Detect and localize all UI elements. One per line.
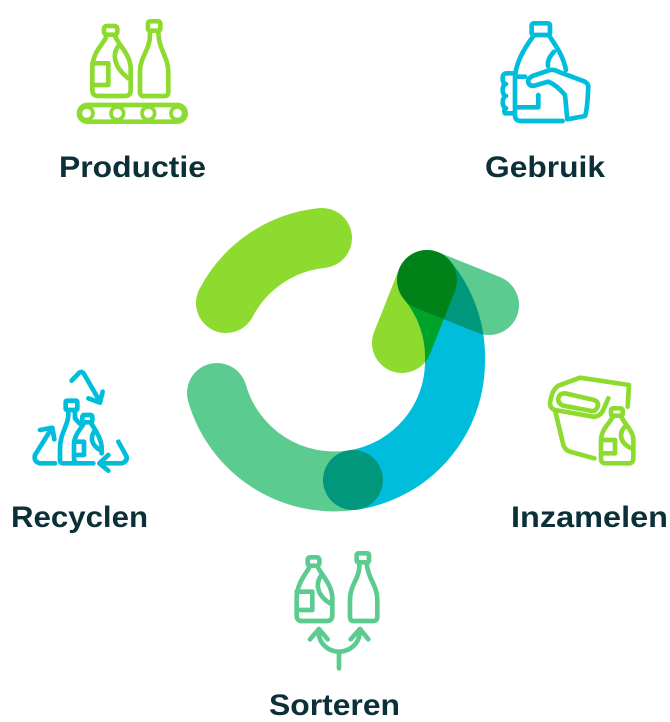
lime arc: [226, 238, 322, 303]
arrowhead lime stroke: [402, 280, 427, 343]
icon: bottles on conveyor belt: [79, 21, 186, 122]
label: Inzamelen: Inzamelen: [511, 501, 668, 534]
icon: hand holding bottle: [503, 23, 588, 121]
label: Recyclen: Recyclen: [11, 501, 148, 534]
label: Gebruik: Gebruik: [485, 151, 605, 184]
label: Productie: Productie: [59, 151, 206, 184]
blue arc: [353, 280, 455, 480]
arrowhead green stroke: [427, 280, 489, 305]
icon: sorted bottles with split arrow: [297, 553, 377, 668]
label: Sorteren: Sorteren: [269, 689, 400, 722]
icon: recycling arrows and bottles: [35, 372, 127, 471]
green arc: [217, 393, 353, 481]
central recycling loop: [217, 238, 489, 481]
icon: collection bin and bottle: [550, 378, 633, 463]
